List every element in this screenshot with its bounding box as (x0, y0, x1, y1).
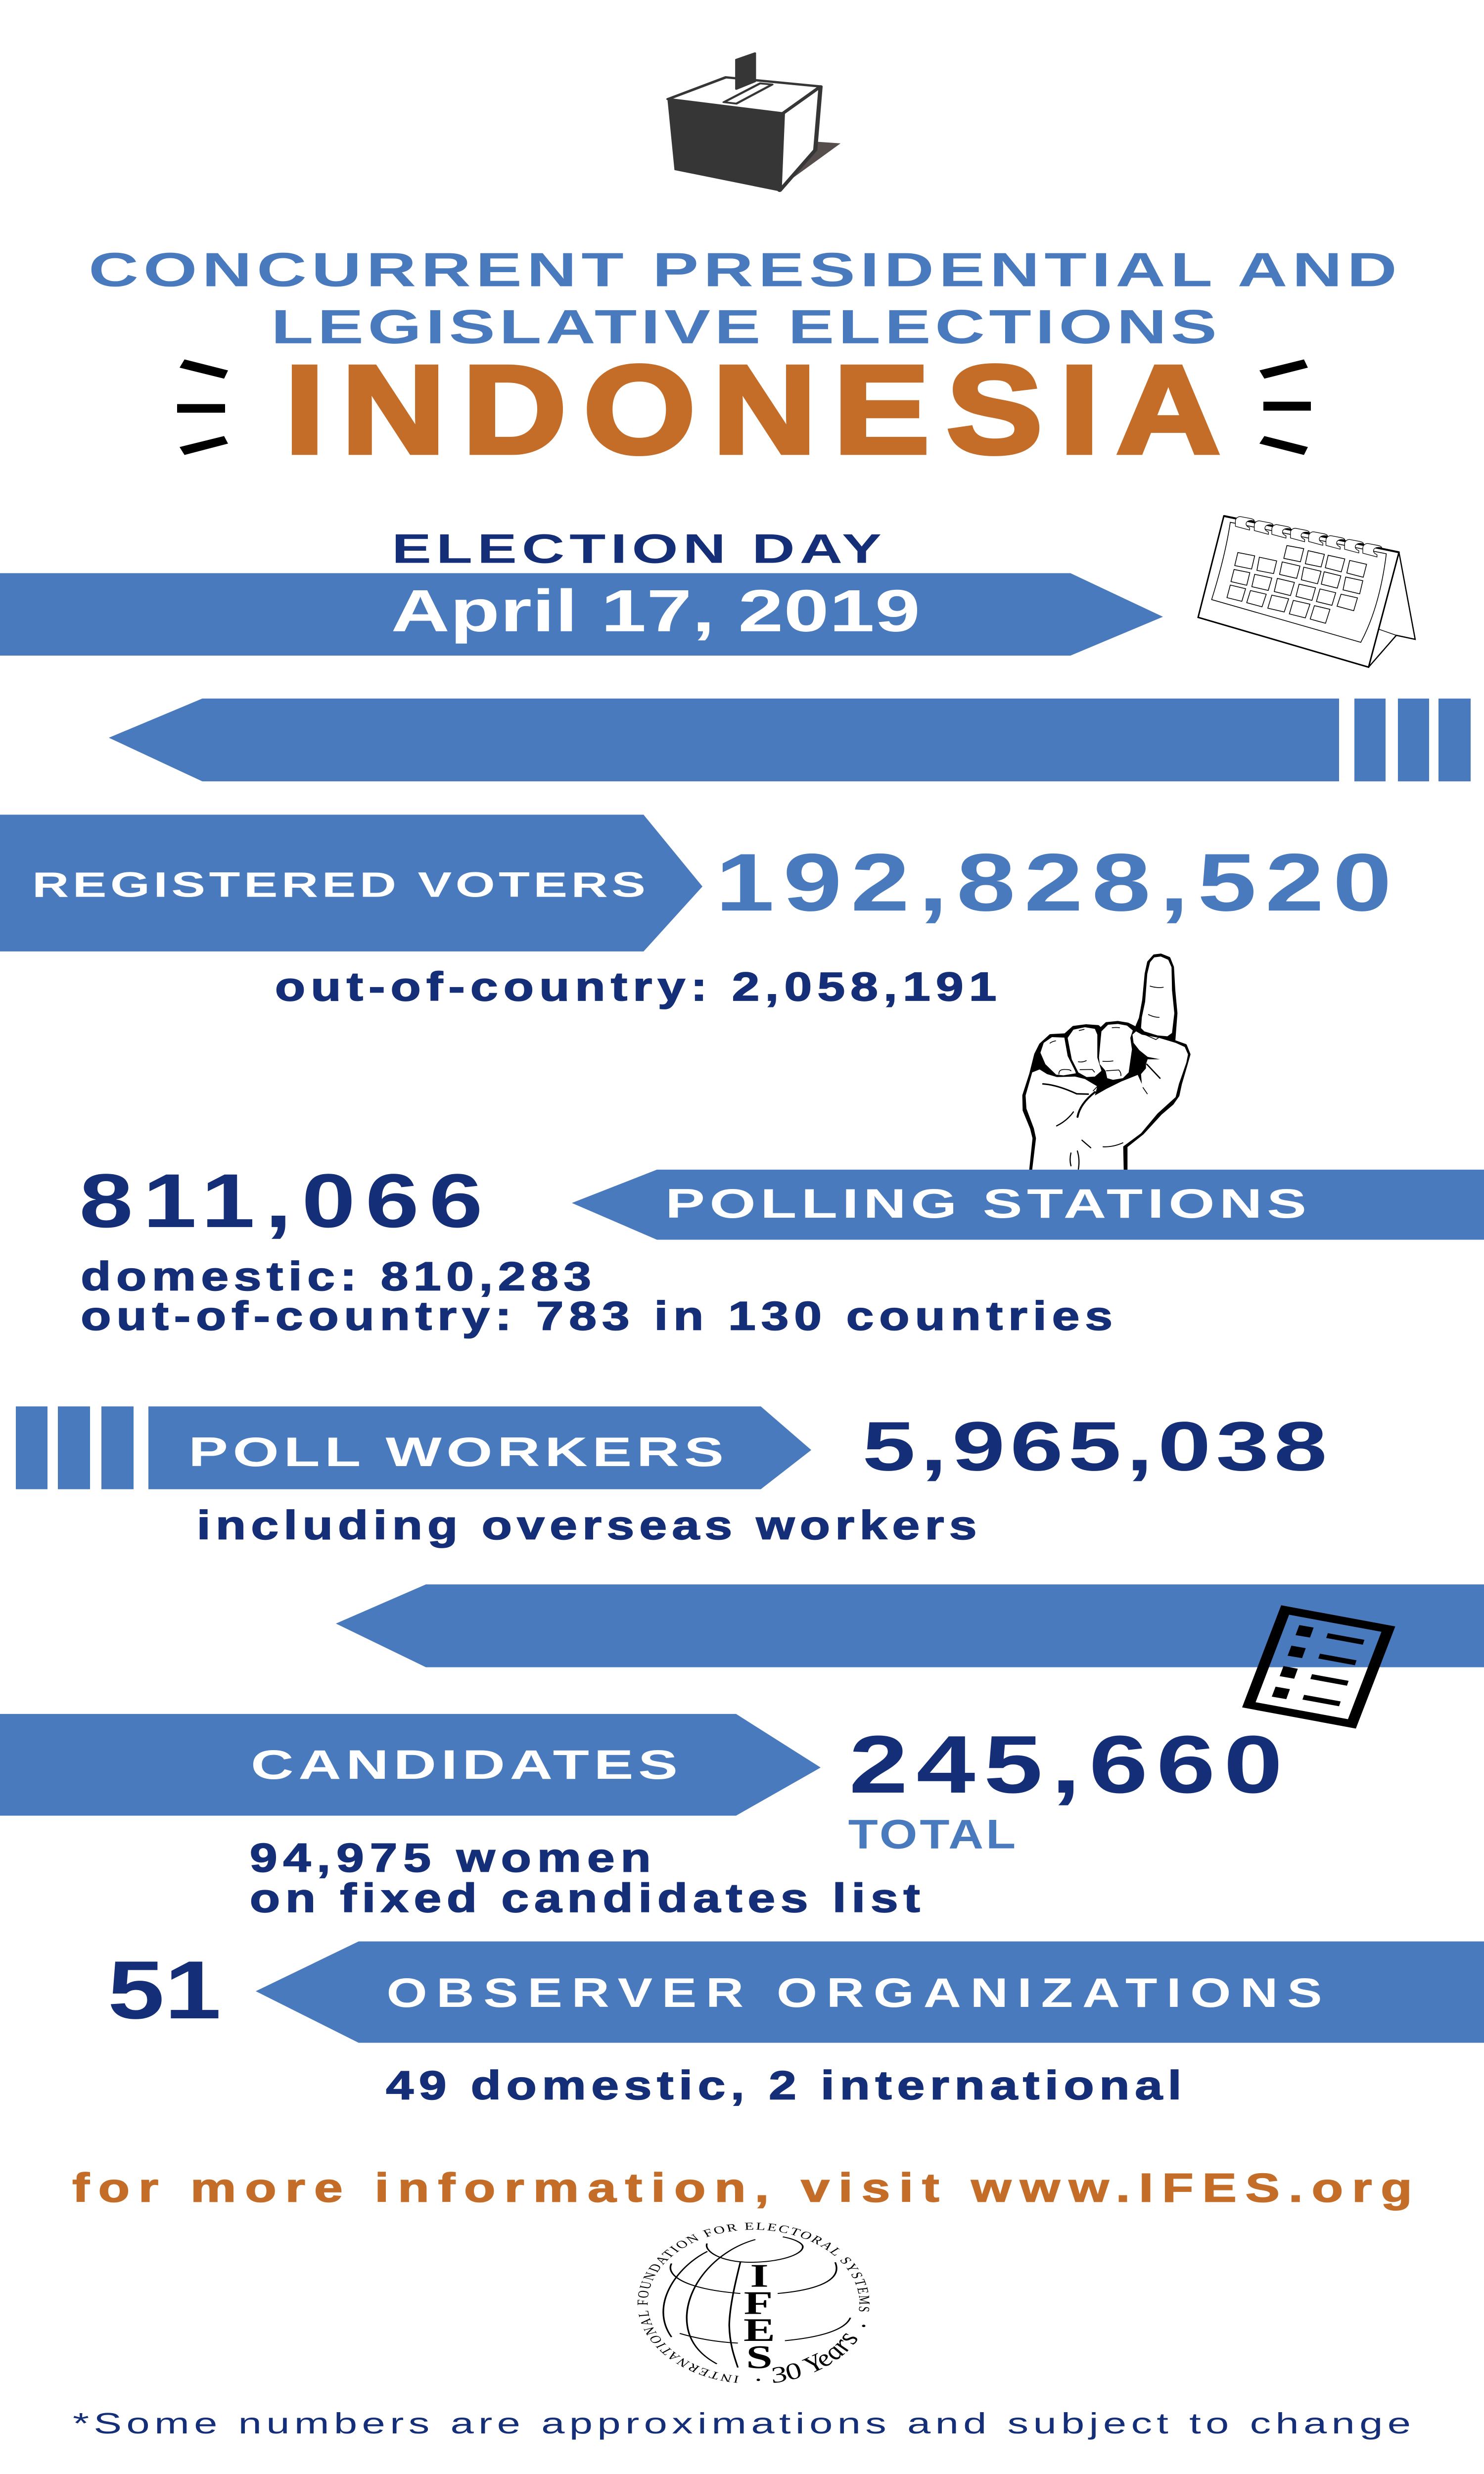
number: poll workers total: 5,965,038 (862, 1407, 1327, 1485)
logo: IFES globe: 30 Years (773, 2333, 857, 2383)
banner: polling stations: POLLING STATIONS (665, 1180, 1306, 1227)
text: women candidates: 94,975 women (250, 1835, 651, 1881)
number: polling stations total: 811,066 (79, 1158, 483, 1243)
number: candidates total (848, 1718, 1283, 1857)
banner: polling stations (572, 1170, 1484, 1240)
text: more information link: for more information, visit www.IFES.org (72, 2165, 1412, 2210)
banner: registered voters (0, 815, 702, 952)
logo: IFES globe: E (743, 2312, 775, 2348)
text: polling stations breakdown (81, 1254, 1113, 1338)
logo: IFES globe: S (746, 2338, 773, 2376)
icon: ballot checklist (1242, 1605, 1395, 1728)
text: out-of-country voters: out-of-country: 2,058,191 (275, 964, 997, 1009)
text: polling stations breakdown: domestic: 810,283 (81, 1254, 591, 1299)
text: women candidates (250, 1835, 920, 1921)
number: candidates total: 245,660 (849, 1718, 1283, 1810)
banner: election date (0, 573, 1163, 656)
banner: poll workers: POLL WORKERS (188, 1428, 724, 1475)
banner: observer organizations: OBSERVER ORGANIZATIONS (386, 1970, 1322, 2016)
banner: candidates (0, 1714, 821, 1815)
banner: empty left-pointing (336, 1584, 1484, 1667)
logo: IFES globe: INTERNATIONAL FOUNDATION FOR ELECTORAL SYSTEMS (637, 2223, 870, 2383)
icon: hand with raised finger (1023, 955, 1189, 1170)
number: observer organizations total: 51 (108, 1944, 221, 2036)
number: candidates total: TOTAL (848, 1811, 1016, 1857)
logo: IFES globe: F (744, 2284, 773, 2321)
banner: empty left-pointing with stripes (109, 699, 1471, 781)
text: observer breakdown: 49 domestic, 2 international (386, 2063, 1182, 2108)
banner: election date: April 17, 2019 (391, 577, 920, 644)
banner: registered voters: REGISTERED VOTERS (32, 865, 646, 904)
text: women candidates: on fixed candidates list (250, 1876, 920, 1921)
icon: desk calendar (1198, 516, 1415, 667)
text: polling stations breakdown: out-of-country: 783 in 130 countries (81, 1293, 1113, 1338)
icon: ballot box (667, 53, 840, 191)
icon: right rays (1259, 359, 1311, 455)
banner: candidates: CANDIDATES (251, 1741, 678, 1788)
title: concurrent presidential and legislative elections (89, 243, 1397, 354)
text: election day label: ELECTION DAY (392, 525, 881, 571)
number: registered voters total: 192,828,520 (715, 837, 1391, 928)
title: concurrent presidential and legislative elections: CONCURRENT PRESIDENTIAL AND (89, 243, 1397, 296)
banner: poll workers (16, 1406, 811, 1489)
banner: observer organizations (256, 1942, 1484, 2043)
title: concurrent presidential and legislative elections: LEGISLATIVE ELECTIONS (271, 300, 1217, 354)
icon: left rays (177, 359, 228, 455)
text: including overseas workers: including overseas workers (197, 1503, 977, 1548)
text: footnote: *Some numbers are approximations and subject to change (73, 2407, 1411, 2440)
heading: Indonesia: INDONESIA (284, 339, 1220, 479)
logo: IFES globe: I (750, 2257, 769, 2294)
